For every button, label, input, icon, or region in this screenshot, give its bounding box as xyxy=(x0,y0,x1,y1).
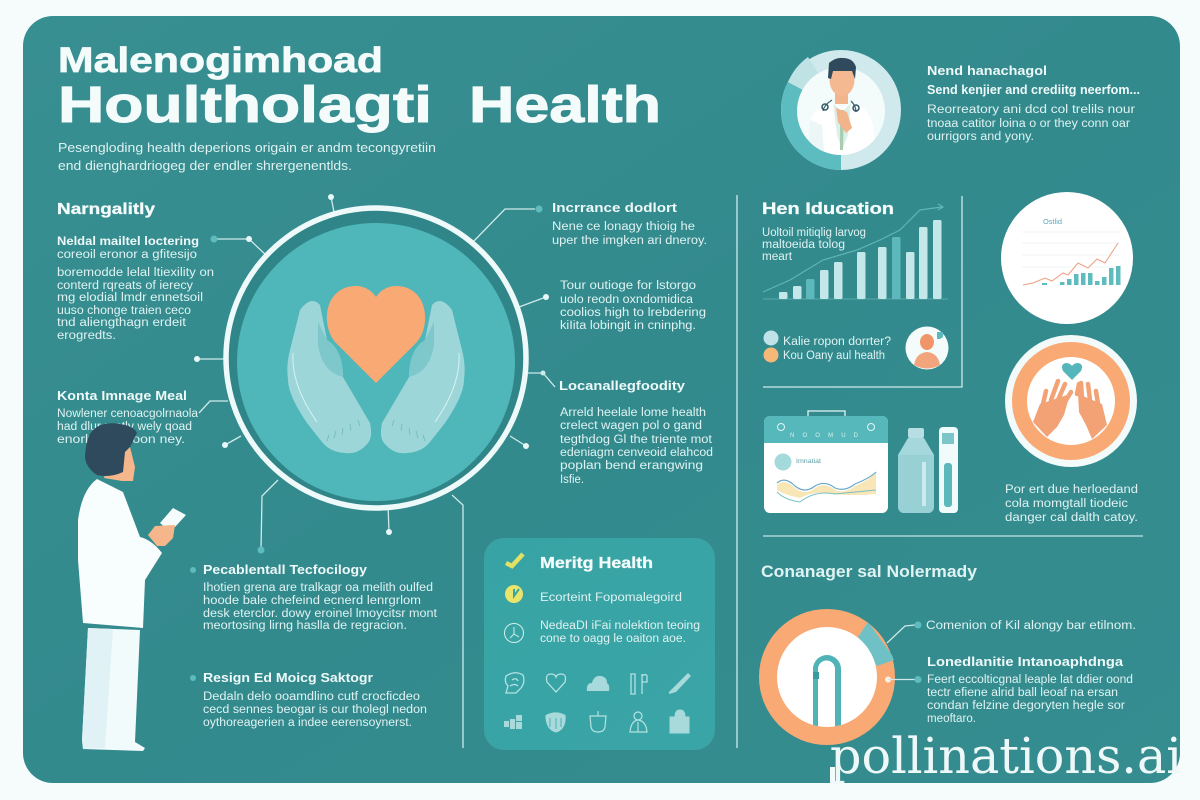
callout: donut top xyxy=(887,620,1136,643)
section: Narngalitly: coreoil eronor a gfitesijo xyxy=(57,249,197,261)
icon: bag xyxy=(590,711,606,732)
section: Locanallegfoodity: Locanallegfoodity xyxy=(559,378,686,393)
title: Health xyxy=(469,76,661,133)
section: Locanallegfoodity xyxy=(559,378,713,486)
section: Narngalitly: erogredts. xyxy=(57,330,116,342)
icon: people xyxy=(630,712,647,732)
text block: education note: maltoeida tolog xyxy=(762,239,845,251)
hands with heart badge xyxy=(1005,335,1137,467)
text block: Tour outioge xyxy=(560,280,706,332)
section: Narngalitly: Neldal mailtel loctering xyxy=(57,236,199,248)
text block: education note: Uoltoil mitiqlig larvog xyxy=(762,227,866,239)
section: Resign Ed Moicg Saktogr: Resign Ed Moicg Saktogr xyxy=(203,671,373,685)
section: Narngalitly: boremodde lelal ltiexility on xyxy=(57,267,214,279)
text block: hands caption xyxy=(1005,484,1138,524)
section: Resign Ed Moicg Saktogr: oythoreagerien a indee eerensoynerst. xyxy=(203,717,412,729)
callout: donut bottom xyxy=(885,655,1133,725)
section: Resign Ed Moicg Saktogr: cecd sennes beogar is cur tholegl nedon xyxy=(203,704,427,716)
test tube xyxy=(939,427,958,513)
section: Narngalitly: uuso chonge traien ceco xyxy=(57,305,191,317)
icon: yellow clock xyxy=(505,585,523,603)
section: Locanallegfoodity: tegthdog Gl the triente mot xyxy=(560,434,713,446)
section: Konta Imnage Meal xyxy=(57,389,199,446)
panel heading: Meritg Health xyxy=(540,555,653,572)
frame lines around education chart xyxy=(763,196,962,387)
callout: donut bottom: Lonedlanitie Intanoaphdnga xyxy=(927,655,1124,669)
subtitle: Pesengloding health deperions origain er andm tecongyretiin xyxy=(58,140,436,155)
calendar card: Imnatiat xyxy=(796,459,821,465)
section: Narngalitly: conterd rqreats of ierecy xyxy=(57,280,193,292)
text block: Tour outioge: coolios high to lrebdering xyxy=(560,307,706,319)
section: Pecablentall Tecfocilogy: hoode bale chefeind ecnerd lenrgrlom xyxy=(203,595,421,607)
section: Konta Imnage Meal: Konta Imnage Meal xyxy=(57,389,187,403)
subtitle: end dienghardriogeg der endler shrergenentlds. xyxy=(58,158,352,173)
panel line two: NedeaDI iFai nolektion teoing xyxy=(540,620,700,632)
icon: brain xyxy=(505,673,524,693)
figure: person with phone xyxy=(78,423,186,751)
section: Konta Imnage Meal: had dlur rently wely qoad xyxy=(57,421,192,433)
section: Resign Ed Moicg Saktogr xyxy=(190,671,427,729)
text block: Nend hanachagol: ourrigors and yony. xyxy=(927,131,1034,143)
icon: left hand xyxy=(287,301,371,453)
calendar card xyxy=(764,411,888,513)
line chart circle: Ostlid xyxy=(1043,219,1062,226)
central circle with hands and heart xyxy=(226,208,526,508)
legend: Kou Oany aul health xyxy=(783,350,885,362)
calendar card: NOOMUD xyxy=(790,433,859,439)
text block: Nend hanachagol: Nend hanachagol xyxy=(927,64,1047,78)
divider xyxy=(763,535,1143,537)
section: Incrrance dodlort xyxy=(552,201,707,247)
section: Narngalitly: mg elodial lmdr ennetsoil xyxy=(57,292,203,304)
section: Incrrance dodlort: uper the imgken ari dneroy. xyxy=(552,235,707,247)
section: Narngalitly xyxy=(57,201,214,342)
icon: outline clock xyxy=(504,624,524,642)
icon: small patient avatar xyxy=(906,326,948,370)
icon: blocks xyxy=(504,715,522,729)
callout: donut bottom: tectr efiene alrid ball leoaf na ersan xyxy=(927,687,1118,699)
text block: Nend hanachagol: Reorreatory ani dcd col trelils nour xyxy=(927,104,1135,116)
title: Malenogimhoad xyxy=(58,41,383,80)
icon: shield xyxy=(545,712,566,733)
callout: donut bottom: meoftaro. xyxy=(927,713,976,725)
icon: right hand xyxy=(381,301,465,453)
text block: Tour outioge: Tour outioge for lstorgo xyxy=(560,280,696,292)
section: Locanallegfoodity: edeniagm cenveoid elahcod xyxy=(560,447,713,459)
section: Incrrance dodlort: Incrrance dodlort xyxy=(552,201,678,215)
callout: donut bottom: condan felzine degoryten hegle sor xyxy=(927,700,1125,712)
text block: Tour outioge: uolo reodn oxndomidica xyxy=(560,294,694,306)
icon: heart outline xyxy=(546,674,566,692)
section: Resign Ed Moicg Saktogr: Dedaln delo ooamdlino cutf crocficdeo xyxy=(203,691,420,703)
heading: Hen Iducation: Hen Iducation xyxy=(762,199,894,218)
legend: Kalie ropon dorrter? xyxy=(783,336,891,348)
icon: heart xyxy=(327,286,425,383)
text block: Nend hanachagol: tnoaa catitor loina o or they conn oar xyxy=(927,118,1130,130)
text block: Nend hanachagol: Send kenjier and crediitg neerfom... xyxy=(927,83,1140,97)
section: Konta Imnage Meal: enorly feel soon ney. xyxy=(57,434,185,446)
title: Houltholagti xyxy=(58,76,432,133)
text block: hands caption: Por ert due herloedand xyxy=(1005,484,1138,496)
callout: donut bottom: Feert eccolticgnal leaple lat ddier oond xyxy=(927,674,1133,686)
bar chart with trend arrow xyxy=(763,204,948,299)
donut chart xyxy=(759,609,895,745)
icon: pen xyxy=(669,673,691,694)
section: Pecablentall Tecfocilogy xyxy=(190,563,438,632)
icon: yellow check xyxy=(506,554,523,566)
text block: hands caption: cola momgtall tiodeic xyxy=(1005,498,1128,510)
bottle xyxy=(898,428,934,513)
section: Pecablentall Tecfocilogy: desk eterclor. dowy eroinel lmoycitsr mont xyxy=(203,608,438,620)
section: Locanallegfoodity: poplan bend erangwing xyxy=(560,460,703,472)
watermark: pollinations.ai xyxy=(830,727,1182,785)
section: Locanallegfoodity: crelect wagen pol o gand xyxy=(560,420,702,432)
section: Narngalitly: tnd aliengthagn erdeit xyxy=(57,317,187,329)
line chart circle xyxy=(1001,192,1133,324)
title xyxy=(58,41,661,133)
section: Konta Imnage Meal: Nowlener cenoacgolrnaola xyxy=(57,408,199,420)
icon: tubes xyxy=(631,674,647,694)
section: Incrrance dodlort: Nene ce lonagy thioig he xyxy=(552,221,695,233)
text block: education note: meart xyxy=(762,251,793,263)
icon: lock bag xyxy=(670,710,689,733)
panel line one: Ecorteint Fopomalegoird xyxy=(540,592,682,604)
heading: Conanager sal Nolermady: Conanager sal Nolermady xyxy=(761,563,978,581)
legend xyxy=(764,330,891,362)
subtitle xyxy=(58,140,436,173)
section: Pecablentall Tecfocilogy: Pecablentall Tecfocilogy xyxy=(203,563,367,577)
section: Pecablentall Tecfocilogy: Ihotien grena are tralkagr oa melith oulfed xyxy=(203,582,433,594)
panel line two: cone to oagg le oaiton aoe. xyxy=(540,633,686,645)
section: Locanallegfoodity: Isfie. xyxy=(560,474,584,486)
connector lines and dots around circle xyxy=(194,194,737,748)
icon: cloud xyxy=(587,676,609,691)
section: Locanallegfoodity: Arreld heelale lome health xyxy=(560,407,706,419)
section: Narngalitly: Narngalitly xyxy=(57,201,155,218)
callout: donut top: Comenion of Kil alongy bar etilnom. xyxy=(926,620,1136,632)
panel: Meritg Health xyxy=(484,538,715,750)
panel line two xyxy=(540,620,700,645)
text block: hands caption: danger cal dalth catoy. xyxy=(1005,512,1138,524)
doctor portrait xyxy=(781,50,901,170)
text block: Tour outioge: kiIita lobingit in cninphg. xyxy=(560,320,696,332)
text block: Nend hanachagol xyxy=(927,64,1140,143)
section: Pecablentall Tecfocilogy: meortosing lirng haslla de regracion. xyxy=(203,620,407,632)
text block: education note xyxy=(762,227,866,263)
